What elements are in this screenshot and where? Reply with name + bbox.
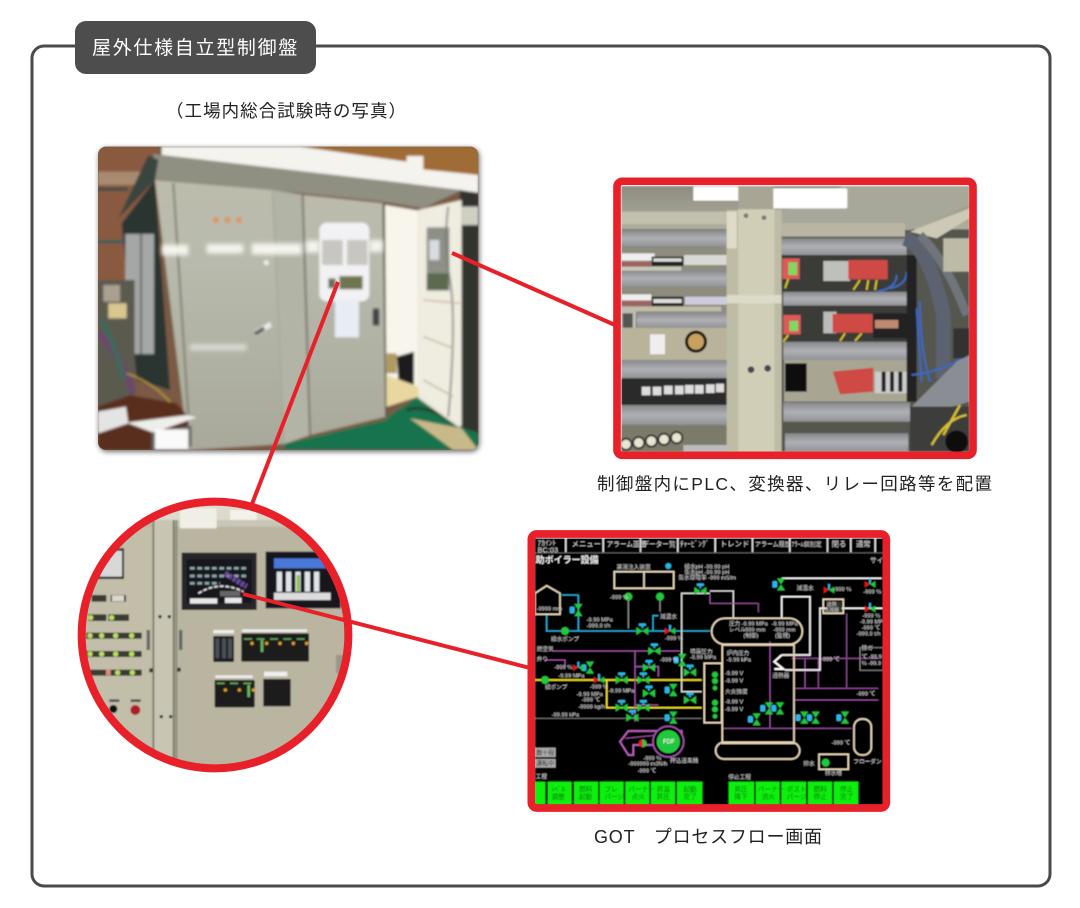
screen contents: ﾚﾍﾞﾙ (552, 786, 566, 794)
screen contents: プレ (604, 786, 618, 794)
menu bar: ｱﾗｰﾑ個別定 (792, 540, 822, 548)
menu bar: BC:03 (538, 545, 558, 554)
menu bar: アラーム画面 (607, 540, 647, 548)
screen contents: 数十程 (536, 749, 554, 757)
menu bar: データー覧 (642, 539, 676, 548)
screen contents (535, 538, 887, 805)
value labels: 給水pH -99.99 pH (684, 562, 729, 570)
value labels: 排水槽 (825, 769, 842, 777)
screen contents: 降下 (734, 792, 748, 801)
value labels: -9.99 MPa (558, 673, 585, 679)
value labels: -99.99 kPa (552, 713, 580, 719)
value labels: -999 % (660, 658, 678, 664)
photo: GOT process flow screen with red border (531, 534, 887, 808)
value labels: -9.99 kPa (727, 658, 752, 664)
red frame (531, 534, 886, 808)
value labels: -999 ℃ (582, 697, 601, 704)
value labels: 噴霧圧力 (690, 647, 713, 655)
title tab (75, 21, 316, 74)
screen contents: 低減器 (824, 607, 839, 614)
boiler drum (535, 572, 871, 769)
menu bar: 通常 (856, 539, 871, 548)
connector arrow: cabinet door to interior photo (452, 253, 615, 325)
green step buttons (535, 782, 858, 805)
value labels: 停止工程 (728, 773, 751, 781)
menu bar: ﾁｬｰﾋﾞﾝｸﾞ (680, 539, 709, 548)
value labels: -9.99 MPa (587, 618, 614, 624)
value labels: 缶水導電率 -999 mS/m (678, 574, 736, 582)
screen contents: 運転中 (536, 760, 554, 768)
value labels: 押込送風機 (670, 756, 699, 764)
screen contents: パージ (604, 793, 625, 801)
screen contents: パージ (787, 793, 807, 801)
menu bar: メニュー (572, 539, 601, 548)
value labels: 排水 (803, 760, 815, 768)
screen contents: バーナー (758, 786, 784, 794)
screen contents: 消火 (762, 792, 775, 801)
value labels: (監視) (775, 632, 790, 640)
value labels: 工程 (536, 772, 547, 780)
photo caption: （工場内総合試験時の写真） (166, 101, 406, 121)
connector arrow: GOT in circle to process flow screen (243, 594, 530, 668)
value labels: -999 % (833, 587, 851, 593)
value labels: -9.99 MPa (608, 689, 635, 695)
caption: GOT screen: GOT プロセスフロー画面 (594, 827, 822, 847)
value labels: -9.99 MPa (742, 622, 769, 628)
screen contents: 昇圧 (734, 786, 748, 794)
pumps and level dots (541, 593, 830, 767)
photo: panel face in red circle (78, 498, 352, 772)
value labels: -9.99 MPa (577, 692, 604, 698)
value labels: フローダン (853, 757, 882, 765)
value labels: -999 % (643, 756, 661, 762)
value labels: -999 % (610, 595, 628, 601)
value labels: 減温水 (660, 612, 677, 620)
valves (570, 604, 582, 616)
screen contents: 助ボイラー設備 (536, 554, 599, 565)
value labels: -999 ℃ (857, 691, 876, 698)
value labels: レベル (729, 627, 746, 634)
value labels: -999.9 t/h (857, 632, 881, 638)
value labels: 火炎強度 (725, 687, 748, 695)
value labels: ℃ -99.9 (862, 653, 882, 660)
value labels: 過熱器 (772, 672, 790, 680)
screen contents: 点火 (632, 793, 645, 801)
caption: panel interior: 制御盤内にPLC、変換器、リレー回路等を配置 (597, 474, 992, 494)
screen contents: 過熱 (827, 601, 837, 608)
screen contents: 停止 (840, 785, 854, 794)
value labels: -9.99 V (725, 699, 743, 705)
value labels: -9.99 MPa (772, 622, 799, 628)
menu bar: トレンド (720, 539, 749, 548)
value labels: 弁り (537, 655, 548, 663)
value labels: 減温水 (797, 584, 814, 592)
value labels: -999 mm (743, 628, 766, 634)
red frame (617, 181, 973, 455)
value labels: 燃空気 (537, 645, 554, 653)
screen contents: 起動 (683, 785, 697, 794)
screen contents: サイ (870, 556, 883, 564)
value labels: % -99.9 (862, 661, 881, 667)
value labels (536, 562, 887, 781)
red ring (82, 502, 348, 768)
screen contents: 燃料 (814, 785, 827, 794)
screen contents: 昇温 (657, 785, 670, 794)
menu bar: 閉る (832, 539, 846, 548)
connector arrow: cabinet panel to circular detail (252, 282, 338, 504)
menu bar: アラーム履歴 (755, 541, 791, 548)
value labels: (制御) (743, 632, 759, 640)
value labels: -999 mm (773, 628, 796, 634)
value labels: -999 ℃ (832, 739, 851, 746)
value labels: -999 ℃ (638, 767, 657, 774)
photo: control panel interior with red border (617, 181, 973, 455)
pipes (535, 578, 883, 738)
title tab: 屋外仕様自立型制御盤 (92, 37, 299, 59)
value labels: 圧力 (729, 620, 741, 628)
value labels: -9999 kg/h (578, 704, 605, 710)
value labels: -9.99 V (725, 679, 743, 685)
screen contents: 完了 (840, 793, 853, 801)
screen contents: 完了 (683, 793, 697, 801)
panel face contents (86, 506, 344, 764)
value labels: -9.99 V (725, 707, 743, 713)
menu bar: ｱｶｲﾝﾄ (538, 539, 556, 548)
screen contents: ポスト (787, 786, 807, 794)
value labels: -9.99 V (725, 671, 743, 677)
value labels: -999 % (590, 684, 608, 690)
value labels: -999 % (862, 614, 880, 620)
value labels: 缶水pH -99.99 pH (684, 568, 729, 576)
value labels: -9.99 MPa (690, 655, 717, 661)
value labels: -999 % (863, 589, 881, 595)
screen contents: 起動 (579, 792, 593, 801)
screen contents: 停止 (814, 792, 827, 801)
screen contents: FDF (663, 740, 675, 746)
value labels: -999 ℃ (862, 625, 881, 632)
value labels: 炉内圧力 (727, 649, 750, 657)
screen contents: 昇圧 (657, 793, 670, 801)
value labels: -999 % (554, 665, 572, 671)
value labels: -999.9 t/h (587, 624, 611, 630)
photo: outdoor control panel cabinet in factory (90, 140, 490, 460)
value labels: 薬液注入装置 (617, 563, 651, 571)
value labels: 排ガ (862, 644, 873, 652)
value labels: 給ポンプ (545, 683, 568, 691)
screen contents: 燃料 (579, 785, 593, 794)
value labels: -999 ℃ (821, 656, 840, 663)
interior photo contents (620, 186, 969, 453)
value labels: -9999 mm (537, 606, 562, 612)
value labels: 給水ポンプ (551, 635, 579, 643)
menu bar (535, 538, 883, 554)
screen contents: バーナー (628, 786, 655, 794)
value labels: -999999 m3N/h (628, 762, 667, 768)
value labels: -999 % (665, 636, 683, 642)
screen contents: 調整 (552, 792, 565, 801)
value labels: -9.99 MPa (860, 620, 887, 626)
